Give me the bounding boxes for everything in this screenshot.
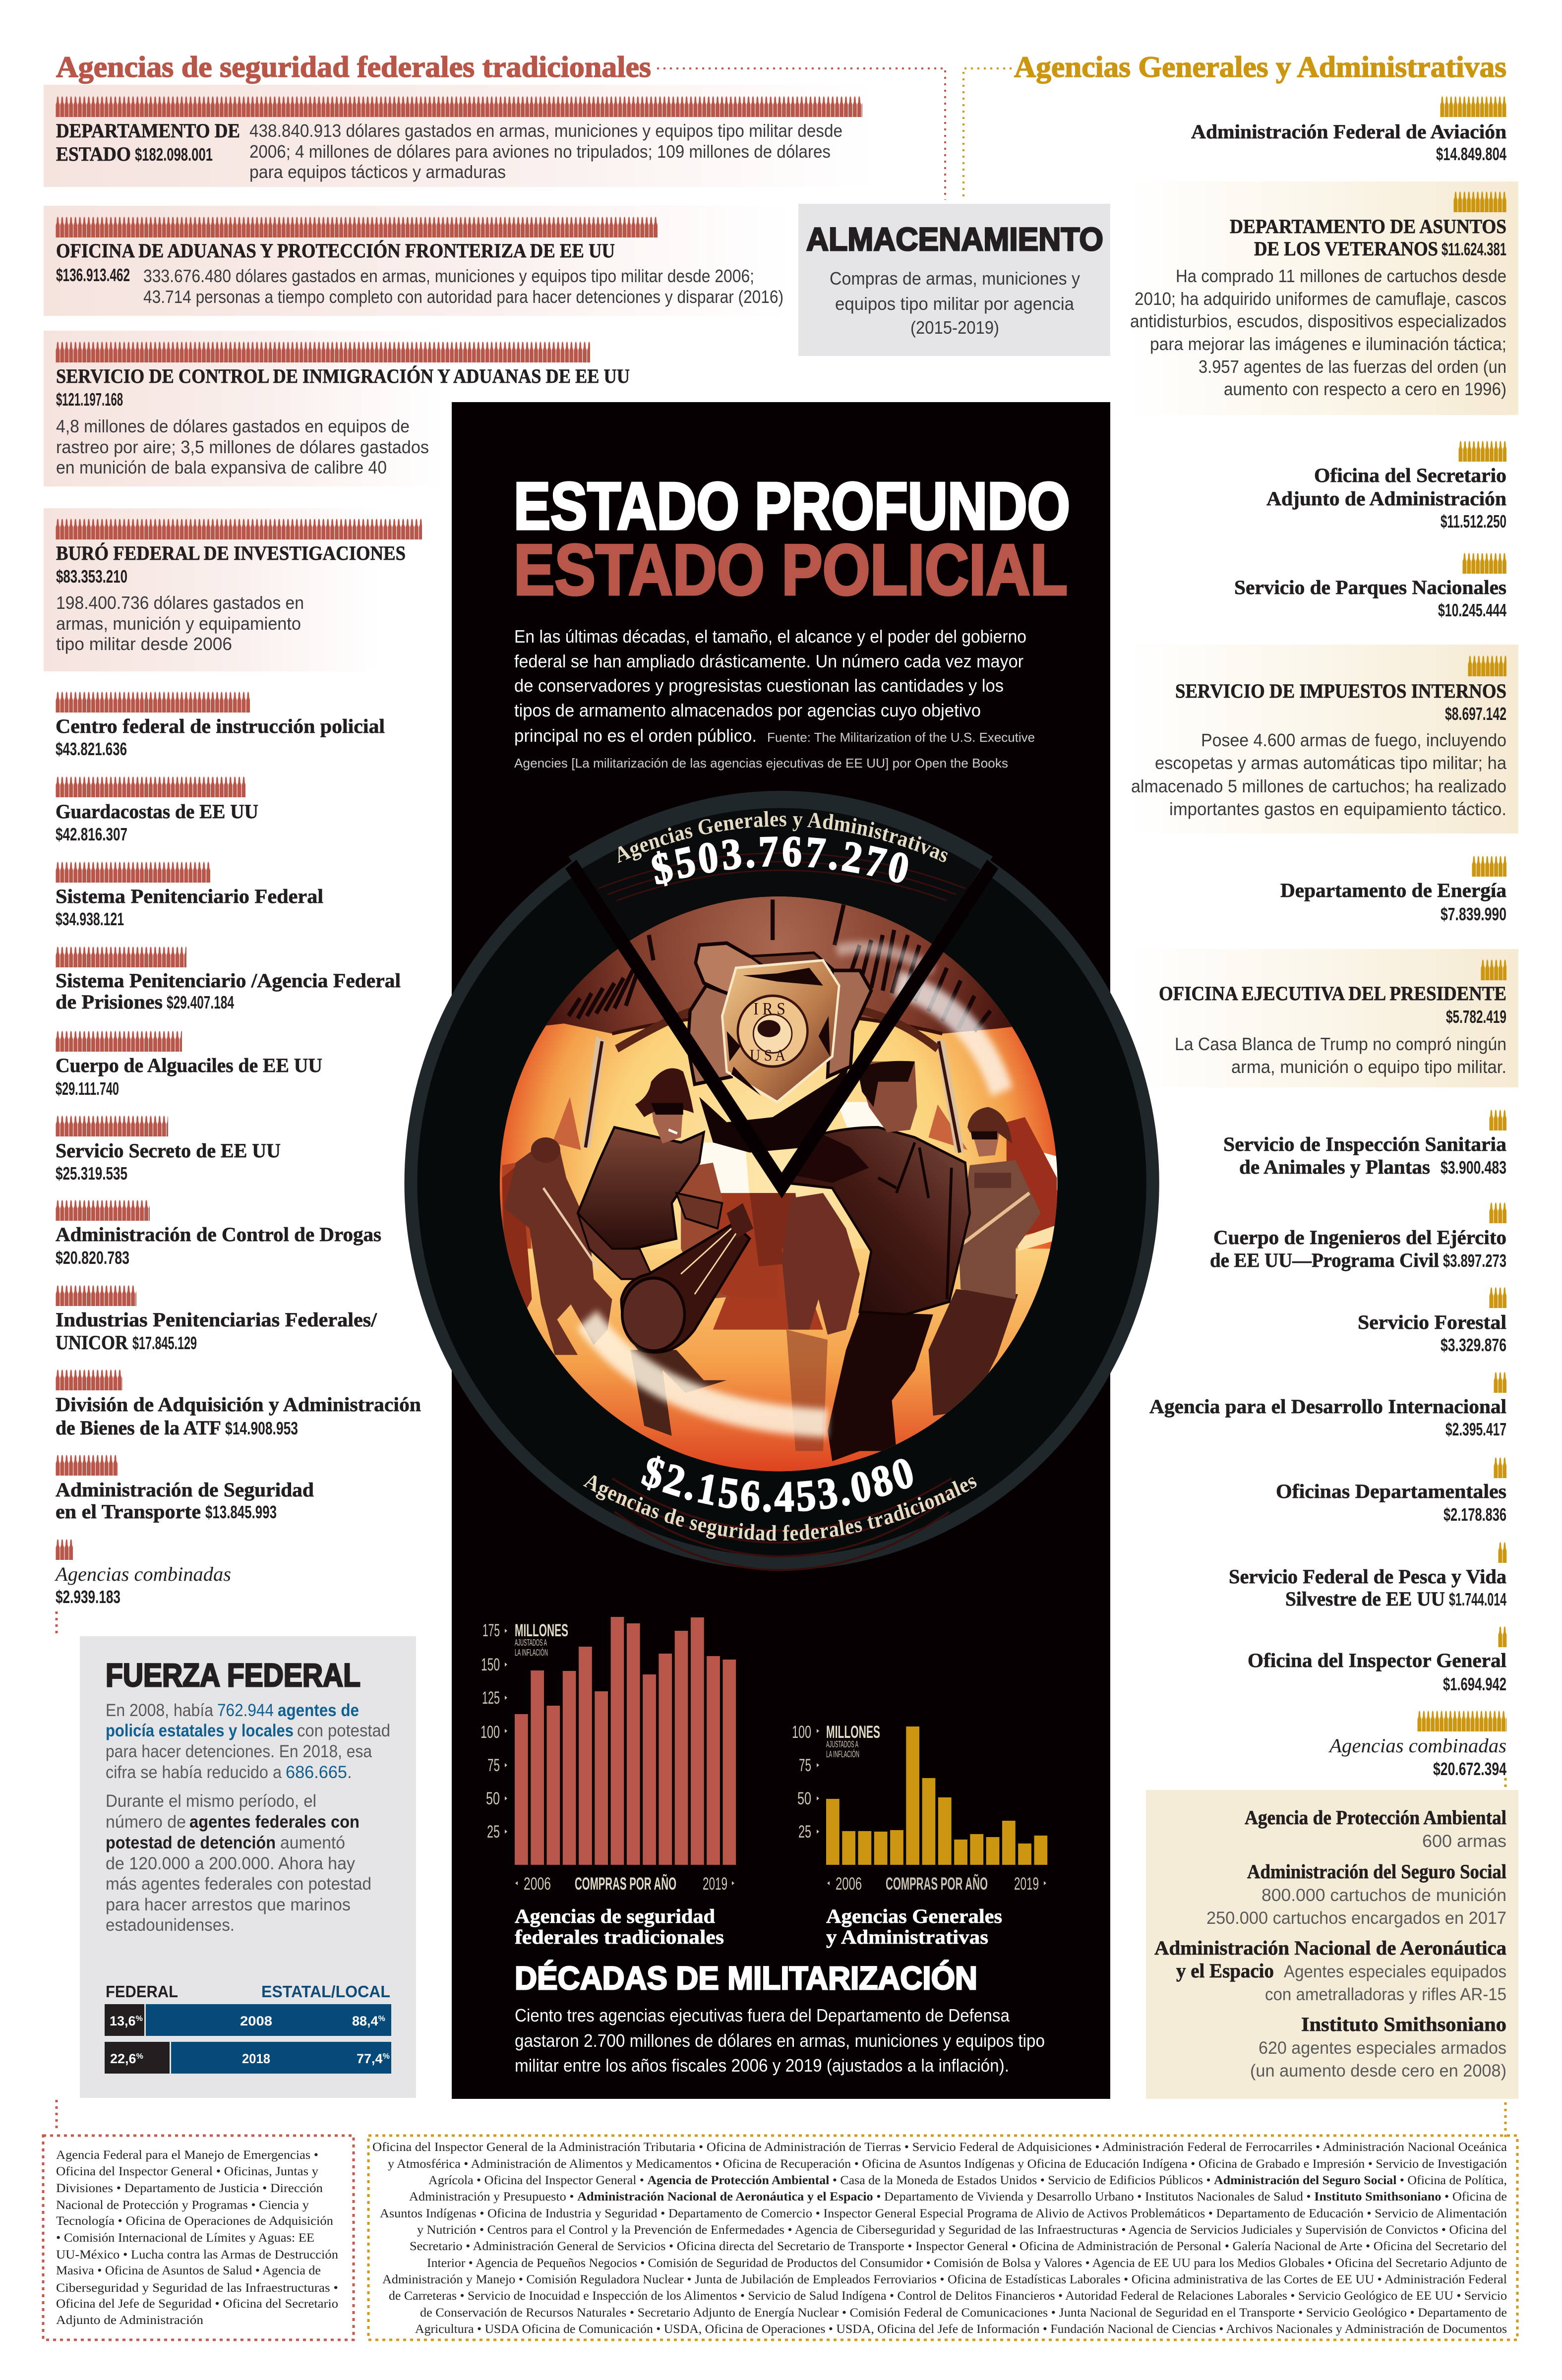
agency: Energia: Departamento de Energía <box>1280 879 1506 901</box>
agency name: OFICINA DE ADUANAS Y PROTECCIÓN FRONTERIZA DE EE UU <box>56 239 615 262</box>
y axis: 150 <box>481 1655 500 1674</box>
intro paragraph: Fuente: The Militarization of the U.S. Executive <box>767 730 1035 745</box>
EPA: Agencia de Protección Ambiental <box>1245 1806 1506 1829</box>
chart: traditional agencies spending <box>481 1617 736 1948</box>
footer box: combined general agencies: y Nutrición • Centros para el Control y la Prevención de Enfermedades • Agencia de Ciberseguridad y Seguridad de las Infraestructuras • Agencia de Servicios Judiciales y Supervisión de Convictos • Oficina del <box>417 2223 1507 2237</box>
stacked bar labels: FEDERAL <box>106 1982 178 2001</box>
footer box: combined traditional agencies: Oficina del Inspector General • Oficinas, Juntas y <box>56 2165 319 2178</box>
agency: Agencia Federal de Prisiones <box>56 947 401 1013</box>
list: traditional agencies <box>54 692 421 1607</box>
footer box: combined traditional agencies: Divisiones • Departamento de Justicia • Dirección <box>56 2182 323 2195</box>
panel: veteranos: para mejorar las imágenes e iluminación táctica; <box>1150 334 1506 354</box>
bullet bar <box>56 96 862 117</box>
agency: Sistema Penitenciario Federal: Sistema Penitenciario Federal <box>56 885 323 907</box>
stacked bar 2008: % <box>136 2015 143 2023</box>
agency: ATF <box>56 1369 421 1439</box>
agency: Pesca y Vida Silvestre <box>1229 1542 1507 1610</box>
agency: Guardacostas: $42.816.307 <box>56 824 127 844</box>
tire text: traditional agencies total: $2.156.453.080 <box>641 1455 913 1512</box>
agency: TSA: Administración de Seguridad <box>56 1479 314 1501</box>
footer box: combined traditional agencies: • Comisión Internacional de Límites y Aguas: EE <box>56 2231 314 2245</box>
SSA: 250.000 cartuchos encargados en 2017 <box>1206 1908 1506 1928</box>
Smithsonian <box>1250 2013 1506 2081</box>
agency: ATF: de Bienes de la ATF <box>56 1417 221 1439</box>
bars <box>515 1617 736 1865</box>
stacked bar 2018: 2018 <box>242 2051 270 2066</box>
footer box: combined traditional agencies: Tecnología • Oficina de Operaciones de Adquisición <box>56 2214 334 2228</box>
SSA: Administración del Seguro Social <box>1247 1860 1506 1883</box>
agency: UNICOR: $17.845.129 <box>132 1333 197 1353</box>
NASA: Agentes especiales equipados <box>1284 1962 1506 1981</box>
footer box: combined traditional agencies: Agencia Federal para el Manejo de Emergencias • <box>56 2148 318 2162</box>
footer box: combined traditional agencies: Nacional de Protección y Programas • Ciencia y <box>56 2199 309 2212</box>
Smithsonian: (un aumento desde cero en 2008) <box>1250 2061 1506 2081</box>
paragraph 2: de 120.000 a 200.000. Ahora hay <box>106 1854 355 1873</box>
panel: FBI <box>44 508 422 671</box>
panel: veteranos: DEPARTAMENTO DE ASUNTOS <box>1230 215 1506 238</box>
agency: Sistema Penitenciario Federal <box>56 862 323 929</box>
badge lettering: U S A <box>750 1046 786 1064</box>
agency: Inspector General <box>1248 1626 1507 1694</box>
chart caption: Agencias de seguridad <box>515 1905 715 1927</box>
NASA: y el Espacio <box>1176 1960 1274 1982</box>
panel: IRS: escopetas y armas automáticas tipo militar; ha <box>1155 753 1507 773</box>
chart caption: Agencias Generales <box>826 1905 1002 1927</box>
agency: Oficinas Departamentales: $2.178.836 <box>1443 1504 1506 1525</box>
unit label: AJUSTADOS A <box>826 1739 858 1749</box>
paragraph 2: para hacer arrestos que marinos <box>106 1895 351 1914</box>
description <box>56 593 304 654</box>
agency: UNICOR: UNICOR <box>56 1331 128 1354</box>
officer with ram <box>578 1068 753 1436</box>
description: Compras de armas, municiones y <box>830 268 1080 289</box>
panel: IRS: Posee 4.600 armas de fuego, incluyendo <box>1201 730 1506 750</box>
unit label <box>826 1723 880 1759</box>
agency: Desarrollo Internacional: $2.395.417 <box>1445 1419 1506 1439</box>
paragraph 2: número de <box>106 1812 186 1832</box>
footer box: combined traditional agencies: Masiva • Oficina de Asuntos de Salud • Agencia de <box>56 2264 321 2277</box>
agency: Sistema Penitenciario Federal: $34.938.121 <box>56 909 124 929</box>
soldier left <box>504 1137 612 1355</box>
panel: Oficina Ejecutiva: OFICINA EJECUTIVA DEL PRESIDENTE <box>1159 982 1506 1005</box>
unit label: LA INFLACIÓN <box>826 1749 859 1759</box>
panel: Departamento de Estado <box>44 85 877 187</box>
intro paragraph: Agencies [La militarización de las agencias ejecutivas de EE UU] por Open the Books <box>514 756 1008 771</box>
amount: $83.353.210 <box>56 566 127 587</box>
paragraph 2 <box>106 1791 371 1935</box>
description: 198.400.736 dólares gastados en <box>56 593 304 613</box>
x axis: COMPRAS POR AÑO <box>886 1874 988 1894</box>
intro paragraph: de conservadores y progresistas cuestionan las cantidades y los <box>514 675 1004 696</box>
panel: Oficina Ejecutiva <box>1126 949 1518 1087</box>
panel: veteranos: DE LOS VETERANOS <box>1254 238 1438 260</box>
paragraph 1: con potestad <box>297 1721 390 1740</box>
description: armas, munición y equipamiento <box>56 613 301 634</box>
tire text: traditional agencies total: Agencias de seguridad federales tradicionales <box>583 1475 977 1541</box>
agency: Servicio Secreto <box>56 1116 281 1184</box>
agency: Ingenieros: Cuerpo de Ingenieros del Ejército <box>1213 1226 1506 1249</box>
amount: $136.913.462 <box>56 265 130 285</box>
agency: Agencia Federal de Prisiones: de Prisiones <box>56 991 163 1013</box>
unit label: MILLONES <box>826 1723 880 1742</box>
description: para equipos tácticos y armaduras <box>249 162 506 182</box>
agency: FAA <box>1191 96 1506 164</box>
agency: Ingenieros: de EE UU—Programa Civil <box>1210 1249 1439 1271</box>
panel: IRS <box>1126 645 1518 833</box>
tire text: general agencies total: Agencias Generales y Administrativas <box>618 811 948 863</box>
agency: UNICOR: Industrias Penitenciarias Federales/ <box>56 1309 377 1331</box>
paragraph 1: 686.665 <box>286 1763 347 1782</box>
SSA <box>1206 1860 1506 1928</box>
agency: Energia: $7.839.990 <box>1441 904 1506 924</box>
stacked bar 2018 <box>105 2042 391 2074</box>
heading: traditional security agencies: Agencias de seguridad federales tradicionales <box>56 51 651 83</box>
soldier right <box>929 1107 1041 1416</box>
tire text: general agencies total: $503.767.270 <box>652 836 908 887</box>
y axis: 75 <box>487 1756 500 1775</box>
stacked bar labels <box>106 1982 390 2001</box>
agency: Ingenieros <box>1210 1202 1506 1271</box>
agency: Inspector General: $1.694.942 <box>1443 1674 1506 1694</box>
agency: DEA: Administración de Control de Drogas <box>56 1223 381 1246</box>
agency: Energia <box>1280 856 1506 924</box>
agency: Guardacostas <box>56 776 258 844</box>
tire ring <box>404 791 1159 1570</box>
unit label: LA INFLACIÓN <box>515 1647 548 1658</box>
glare <box>587 948 1002 1423</box>
title: ESTADO PROFUNDO <box>514 469 1070 543</box>
paragraph: decades: militar entre los años fiscales 2006 y 2019 (ajustados a la inflación). <box>515 2055 1009 2076</box>
agency: Inspector General: Oficina del Inspector General <box>1248 1649 1506 1671</box>
heading: FUERZA FEDERAL <box>106 1657 360 1693</box>
panel: veteranos: 2010; ha adquirido uniformes de camuflaje, cascos <box>1135 289 1506 309</box>
paragraph 1: 762.944 <box>217 1701 274 1720</box>
intro paragraph <box>514 626 1035 771</box>
panel: Fuerza federal <box>80 1636 416 2098</box>
agency: Inspeccion Sanitaria <box>1223 1110 1506 1178</box>
description <box>143 266 783 307</box>
panel: Oficina Ejecutiva: $5.782.419 <box>1446 1007 1506 1027</box>
x axis <box>515 1874 734 1894</box>
x axis: 2006 <box>836 1874 862 1894</box>
unit label <box>515 1621 568 1658</box>
footer box: combined general agencies: Secretario • Administración General de Servicios • Oficina directa del Secretario de Transporte • Inspector General • Oficina de Administración de Personal • Galería Nacional de Arte • Oficina del Secretario del <box>410 2240 1507 2253</box>
agency name <box>56 119 240 165</box>
agency: Servicio Secreto: Servicio Secreto de EE UU <box>56 1139 281 1162</box>
EPA: 600 armas <box>1422 1832 1506 1851</box>
panel: Almacenamiento <box>798 204 1110 356</box>
agency: DEA: $20.820.783 <box>56 1248 129 1268</box>
paragraph 2: estadounidenses. <box>106 1915 235 1935</box>
stacked bar 2008: 13,6 <box>110 2014 136 2028</box>
agency: TSA <box>56 1455 314 1523</box>
roof <box>546 896 1012 1034</box>
agency: Centro federal: $43.821.636 <box>56 739 127 759</box>
x axis: COMPRAS POR AÑO <box>575 1874 676 1894</box>
panel: IRS: importantes gastos en equipamiento táctico. <box>1169 799 1506 819</box>
chart caption: y Administrativas <box>826 1926 988 1948</box>
agency: Forestal <box>1358 1287 1506 1355</box>
panel: ICE <box>44 331 630 486</box>
agency: Centro federal <box>56 692 385 759</box>
paragraph 1: En 2008, había <box>106 1701 213 1720</box>
agency: Guardacostas: Guardacostas de EE UU <box>56 800 258 823</box>
panel: veteranos: antidisturbios, escudos, dispositivos especializados <box>1130 311 1506 331</box>
agency: Ingenieros: $3.897.273 <box>1443 1250 1506 1271</box>
footer box: combined general agencies: Administración y Manejo • Comisión Reguladora Nuclear • Junta de Jubilación de Empleados Ferroviarios • Oficina de Estadísticas Laborales • Oficina administrativa de las Cortes de EE UU • Administración Federal <box>382 2273 1507 2286</box>
x axis: 2019 <box>1014 1874 1039 1894</box>
agency: TSA: $13.845.993 <box>205 1502 277 1522</box>
stacked bar 2018: 77,4 <box>357 2051 383 2066</box>
footer box: combined general agencies: de Carreteras • Servicio de Inocuidad e Inspección de los Alimentos • Servicio de Salud Indígena • Control de Delitos Financieros • Autoridad Federal de Relaciones Laborales • Servicio Geológico de EE UU • Servicio <box>389 2289 1507 2303</box>
fist holding badge <box>688 943 871 1152</box>
agency: Forestal: Servicio Forestal <box>1358 1311 1506 1333</box>
illustration: tire with law-enforcement scene <box>405 790 1159 1571</box>
description: 333.676.480 dólares gastados en armas, municiones y equipos tipo militar desde 2006; <box>143 266 754 286</box>
agency name: ESTADO <box>56 143 131 165</box>
agency: Desarrollo Internacional: Agencia para el Desarrollo Internacional <box>1149 1395 1506 1418</box>
stacked bar 2018: % <box>136 2052 143 2061</box>
panel: Oficina Ejecutiva: arma, munición o equipo tipo militar. <box>1231 1057 1506 1077</box>
agency: Alguaciles <box>56 1031 322 1099</box>
bullet bar <box>56 217 658 238</box>
agency: UNICOR <box>56 1285 377 1354</box>
bullet bar <box>56 519 422 539</box>
paragraph 1: policía estatales y locales <box>106 1721 294 1740</box>
y axis: 25 <box>798 1822 811 1842</box>
description: equipos tipo militar por agencia <box>835 294 1075 314</box>
agency name: DEPARTAMENTO DE <box>56 119 240 142</box>
EPA <box>1245 1806 1506 1851</box>
description <box>249 120 842 182</box>
agency: Alguaciles: $29.111.740 <box>56 1078 119 1099</box>
agency: combined <box>54 1539 231 1607</box>
y axis: 100 <box>792 1723 811 1742</box>
NASA <box>1154 1937 1506 2004</box>
y axis: 125 <box>482 1688 500 1708</box>
intro paragraph: tipos de armamento almacenados por agencias cuyo objetivo <box>514 700 981 720</box>
y axis: 50 <box>486 1789 500 1808</box>
panel: main black <box>452 402 1110 2099</box>
agency: Secretario Adjunto <box>1266 441 1506 532</box>
agency: Forestal: $3.329.876 <box>1441 1335 1506 1355</box>
agency: DEA <box>56 1200 381 1268</box>
footer box: combined general agencies: Oficina del Inspector General de la Administración Tributaria • Oficina de Administración de Tierras • Servicio Federal de Adquisiciones • Administración Federal de Ferrocarriles • Administración Nacional Oceánica <box>372 2141 1507 2154</box>
stacked bar 2008: 88,4 <box>352 2014 378 2028</box>
paragraph 1: para hacer detenciones. En 2018, esa <box>106 1742 372 1761</box>
intro paragraph: En las últimas décadas, el tamaño, el alcance y el poder del gobierno <box>514 626 1026 647</box>
panel: IRS: SERVICIO DE IMPUESTOS INTERNOS <box>1175 680 1506 702</box>
agency: Agencia Federal de Prisiones: $29.407.184 <box>167 992 234 1012</box>
description: 4,8 millones de dólares gastados en equipos de <box>56 416 410 436</box>
footer box: combined general agencies: Interior • Agencia de Pequeños Negocios • Comisión de Seguridad de Productos del Consumidor • Comisión de Bolsa y Valores • Agencia de EE UU para los Medios Globales • Oficina del Secretario Adjunto de <box>427 2257 1507 2270</box>
description: 2006; 4 millones de dólares para aviones no tripulados; 109 millones de dólares <box>249 141 831 162</box>
description <box>830 268 1080 338</box>
paragraph 1 <box>106 1701 390 1782</box>
description <box>56 416 429 477</box>
agency: combined: Agencias combinadas <box>1328 1734 1506 1757</box>
agency: Parques: Servicio de Parques Nacionales <box>1234 576 1506 598</box>
chart caption <box>515 1905 724 1948</box>
paragraph: decades <box>515 2005 1045 2076</box>
chart caption: federales tradicionales <box>515 1926 724 1948</box>
SSA: 800.000 cartuchos de munición <box>1262 1886 1506 1905</box>
agency: Inspeccion Sanitaria: de Animales y Plantas <box>1239 1156 1430 1178</box>
unit label: MILLONES <box>515 1621 568 1640</box>
badge lettering: I R S <box>753 1000 785 1018</box>
footer box: combined traditional agencies: Adjunto de Administración <box>56 2314 204 2327</box>
intro paragraph: federal se han ampliado drásticamente. Un número cada vez mayor <box>514 651 1023 671</box>
intro paragraph: principal no es el orden público. <box>514 725 757 746</box>
agency: FAA: Administración Federal de Aviación <box>1191 120 1506 143</box>
footer box: combined general agencies: Agrícola • Oficina del Inspector General • Agencia de Protección Ambiental • Casa de la Moneda de Estados Unidos • Servicio de Edificios Públicos • Administración del Seguro Social • Oficina de Política, <box>428 2174 1507 2187</box>
tire text: general agencies total <box>618 811 948 887</box>
agency: Oficinas Departamentales: Oficinas Departamentales <box>1276 1480 1506 1502</box>
Smithsonian: Instituto Smithsoniano <box>1301 2013 1506 2035</box>
paragraph 2: aumentó <box>280 1833 345 1852</box>
footer box: combined general agencies <box>368 2136 1517 2340</box>
panel: agencies with arms <box>1146 1790 1518 2099</box>
stacked bar 2018: 22,6 <box>110 2051 136 2066</box>
agency: Parques <box>1234 553 1506 620</box>
description: 43.714 personas a tiempo completo con autoridad para hacer detenciones y disparar (2016) <box>143 287 783 307</box>
panel: veteranos: aumento con respecto a cero en 1996) <box>1224 379 1506 399</box>
description: (2015-2019) <box>910 317 999 338</box>
NASA: Administración Nacional de Aeronáutica <box>1154 1937 1506 1959</box>
footer box: combined general agencies: Administración y Presupuesto • Administración Nacional de Aeronáutica y el Espacio • Departamento de Vivienda y Desarrollo Urbano • Institutos Nacionales de Salud • Instituto Smithsoniano • Oficina de <box>409 2190 1507 2203</box>
panel: veteranos <box>1126 181 1518 415</box>
footer box: combined traditional agencies: Ciberseguridad y Seguridad de las Infraestructuras • <box>56 2281 338 2295</box>
y axis: 50 <box>797 1789 811 1808</box>
chart caption <box>826 1905 1002 1948</box>
title: ESTADO POLICIAL <box>514 530 1068 610</box>
panel: Oficina Ejecutiva: La Casa Blanca de Trump no compró ningún <box>1175 1034 1506 1054</box>
stacked bar 2008: % <box>378 2015 385 2023</box>
background crowd <box>502 1163 860 1335</box>
heading: decades of militarization: DÉCADAS DE MILITARIZACIÓN <box>515 1960 977 1996</box>
x axis: 2006 <box>524 1874 551 1894</box>
panel: veteranos: $11.624.381 <box>1442 239 1506 259</box>
stacked bar 2008: 2008 <box>240 2014 272 2028</box>
agency name: BURÓ FEDERAL DE INVESTIGACIONES <box>56 542 406 564</box>
bullet bar <box>56 342 590 362</box>
footer box: combined general agencies: de Conservación de Recursos Naturales • Secretario Adjunto de Energía Nuclear • Comisión Federal de Comunicaciones • Junta Nacional de Seguridad en el Transporte • Servicio Geológico • Departamento de <box>420 2306 1507 2320</box>
paragraph 1: cifra se había reducido a <box>106 1763 282 1782</box>
stacked bar 2018: % <box>383 2052 390 2061</box>
badge lettering <box>750 1000 786 1064</box>
panel: veteranos: Ha comprado 11 millones de cartuchos desde <box>1176 266 1506 286</box>
paragraph: decades: Ciento tres agencias ejecutivas fuera del Departamento de Defensa <box>515 2005 1010 2025</box>
agency: Oficinas Departamentales <box>1276 1457 1506 1525</box>
footer box: combined traditional agencies: UU-México • Lucha contra las Armas de Destrucción <box>56 2248 339 2261</box>
heading: general and administrative agencies: Agencias Generales y Administrativas <box>1014 51 1506 83</box>
agency: Centro federal: Centro federal de instrucción policial <box>56 715 385 737</box>
footer box: combined traditional agencies <box>43 2136 354 2340</box>
y axis: 175 <box>482 1621 500 1640</box>
agency: Desarrollo Internacional <box>1149 1372 1506 1439</box>
description: tipo militar desde 2006 <box>56 634 232 654</box>
paragraph 2: más agentes federales con potestad <box>106 1874 371 1894</box>
agency: Pesca y Vida Silvestre: $1.744.014 <box>1449 1589 1506 1609</box>
paragraph 1: . <box>347 1763 352 1782</box>
gap lines <box>571 864 993 1186</box>
amount: $121.197.168 <box>56 389 123 410</box>
panel: Oficina de Aduanas <box>44 206 792 316</box>
panel: IRS: $8.697.142 <box>1445 704 1506 724</box>
x axis <box>827 1874 1046 1894</box>
agency: FAA: $14.849.804 <box>1436 144 1506 164</box>
agency: combined: $2.939.183 <box>56 1587 120 1607</box>
paragraph 2: Durante el mismo período, el <box>106 1791 316 1811</box>
amount: $182.098.001 <box>135 144 213 165</box>
panel: veteranos: 3.957 agentes de las fuerzas del orden (un <box>1199 357 1506 377</box>
footer box: combined traditional agencies: Oficina del Jefe de Seguridad • Oficina del Secretario <box>56 2297 338 2311</box>
agency: Pesca y Vida Silvestre: Silvestre de EE UU <box>1285 1588 1445 1610</box>
footer box: combined general agencies: y Atmosférica • Administración de Alimentos y Medicamentos • Oficina de Recuperación • Oficina de Asuntos Indígenas y Oficina de Educación Indígena • Oficina de Grabado e Impresión • Servicio de Investigación <box>388 2157 1507 2171</box>
agency: Parques: $10.245.444 <box>1438 600 1506 620</box>
y axis <box>792 1723 819 1842</box>
agency name: SERVICIO DE CONTROL DE INMIGRACIÓN Y ADUANAS DE EE UU <box>56 365 630 387</box>
paragraph 1: agentes de <box>278 1701 359 1720</box>
scene <box>500 896 1057 1472</box>
agency: ATF: División de Adquisición y Administración <box>56 1393 421 1416</box>
agency: Inspeccion Sanitaria: Servicio de Inspección Sanitaria <box>1223 1133 1506 1155</box>
chart: general agencies spending <box>792 1723 1047 1948</box>
unit label: AJUSTADOS A <box>515 1638 547 1648</box>
title <box>514 469 1070 610</box>
agency: Agencia Federal de Prisiones: Sistema Penitenciario /Agencia Federal <box>56 969 401 992</box>
agency: Secretario Adjunto: Oficina del Secretario <box>1314 464 1506 486</box>
paragraph 2: agentes federales con <box>189 1812 360 1832</box>
paragraph: decades: gastaron 2.700 millones de dólares en armas, municiones y equipos tipo <box>515 2030 1045 2051</box>
agency: Secretario Adjunto: Adjunto de Administración <box>1266 487 1506 510</box>
Smithsonian: 620 agentes especiales armados <box>1259 2038 1506 2058</box>
description: en munición de bala expansiva de calibre 40 <box>56 457 387 477</box>
stacked bar labels: ESTATAL/LOCAL <box>261 1982 390 2001</box>
list: general agencies <box>1126 96 1518 1779</box>
agency: Pesca y Vida Silvestre: Servicio Federal de Pesca y Vida <box>1229 1565 1506 1588</box>
heading: ALMACENAMIENTO <box>806 221 1103 257</box>
agency: Inspeccion Sanitaria: $3.900.483 <box>1441 1157 1506 1178</box>
agency: combined <box>1328 1711 1506 1779</box>
agency: Alguaciles: Cuerpo de Alguaciles de EE UU <box>56 1054 322 1076</box>
paragraph 2: potestad de detención <box>106 1833 276 1852</box>
footer box: combined general agencies: Agricultura • USDA Oficina de Comunicación • USDA, Oficina de Operaciones • USDA, Oficina del Jefe de Información • Fundación Nacional de Ciencias • Archivos Nacionales y Administración de Documentos <box>415 2322 1507 2336</box>
agency: Servicio Secreto: $25.319.535 <box>56 1163 127 1184</box>
agency: Secretario Adjunto: $11.512.250 <box>1441 511 1506 532</box>
bars <box>826 1726 1047 1865</box>
y axis: 100 <box>481 1723 500 1742</box>
NASA: con ametralladoras y rifles AR-15 <box>1265 1985 1506 2004</box>
y axis: 75 <box>799 1756 811 1775</box>
y axis <box>481 1621 507 1842</box>
x axis: 2019 <box>703 1874 727 1894</box>
panel: IRS: almacenado 5 millones de cartuchos; ha realizado <box>1131 776 1506 796</box>
y axis: 25 <box>487 1822 500 1842</box>
description: rastreo por aire; 3,5 millones de dólares gastados <box>56 437 429 457</box>
agency: ATF: $14.908.953 <box>225 1418 298 1438</box>
man in suit <box>782 1061 970 1461</box>
agency: combined: Agencias combinadas <box>54 1563 231 1585</box>
agency: combined: $20.672.394 <box>1433 1759 1506 1779</box>
stacked bar 2008 <box>105 2004 391 2036</box>
description: 438.840.913 dólares gastados en armas, municiones y equipos tipo militar desde <box>249 120 842 141</box>
footer box: combined general agencies: Asuntos Indígenas • Oficina de Industria y Seguridad • Departamento de Comercio • Inspector General Especial Programa de Alivio de Activos Problemáticos • Departamento de Educación • Servicio de Alimentación <box>380 2207 1507 2220</box>
agency: TSA: en el Transporte <box>56 1500 201 1523</box>
